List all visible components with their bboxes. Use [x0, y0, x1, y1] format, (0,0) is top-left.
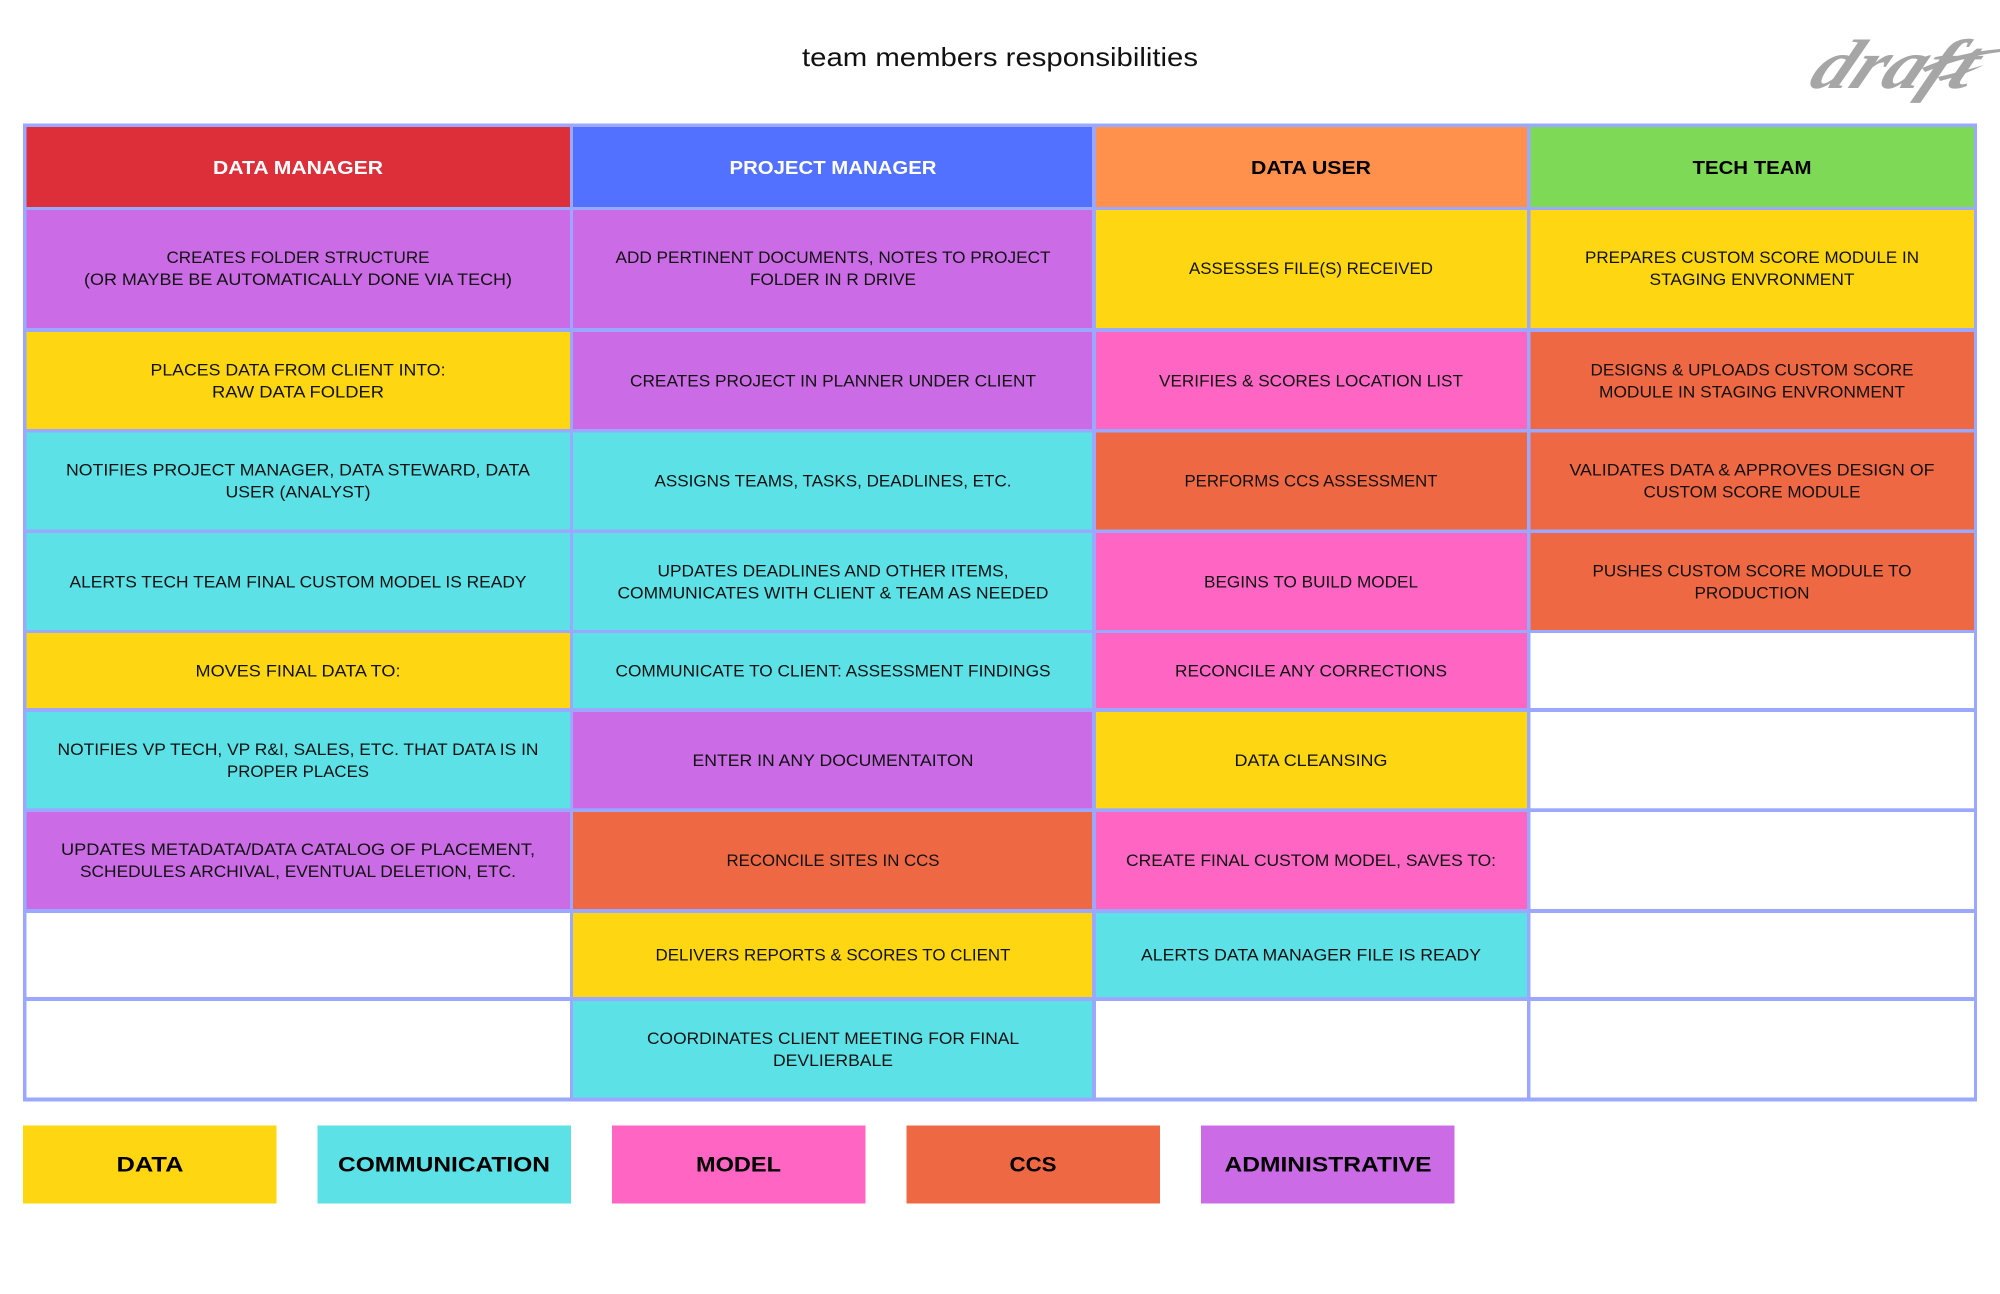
project manager: enter documentation: ENTER IN ANY DOCUMENTAITON — [692, 751, 974, 770]
tech team: empty cell — [1530, 633, 1974, 708]
tech team: prepares custom score module: PREPARES CUSTOM SCORE MODULE IN — [1585, 248, 1919, 267]
data user: begins to build model — [1096, 533, 1527, 630]
project manager: coordinates client meeting: DEVLIERBALE — [773, 1051, 893, 1070]
legend: administrative — [1201, 1126, 1454, 1204]
column header: project manager — [573, 127, 1092, 207]
project manager: creates project — [573, 332, 1092, 429]
column header: data manager — [26, 127, 570, 207]
column header: data user: DATA USER — [1251, 157, 1371, 178]
data manager: alerts tech team — [26, 533, 570, 630]
data user: data cleansing: DATA CLEANSING — [1234, 751, 1388, 770]
responsibilities table — [23, 124, 1977, 1102]
data user: assesses files — [1096, 210, 1527, 328]
tech team: prepares custom score module: STAGING ENVRONMENT — [1650, 270, 1854, 289]
project manager: creates project: CREATES PROJECT IN PLANNER UNDER CLIENT — [630, 372, 1036, 390]
project manager: assigns teams: ASSIGNS TEAMS, TASKS, DEADLINES, ETC. — [654, 472, 1012, 490]
column header: tech team — [1530, 127, 1974, 207]
tech team: pushes to production: PUSHES CUSTOM SCORE MODULE TO — [1592, 562, 1912, 580]
data user: verifies location list: VERIFIES & SCORES LOCATION LIST — [1159, 372, 1463, 390]
data manager: places data: PLACES DATA FROM CLIENT INTO: — [150, 360, 446, 380]
data manager: creates folder structure: CREATES FOLDER STRUCTURE — [166, 248, 430, 267]
legend: model — [612, 1126, 866, 1204]
data user: verifies location list — [1096, 332, 1527, 429]
project manager: communicate findings — [573, 633, 1092, 708]
tech team: pushes to production — [1530, 533, 1974, 630]
data manager: moves final data — [26, 633, 570, 708]
data user: ccs assessment: PERFORMS CCS ASSESSMENT — [1184, 472, 1438, 490]
data manager: notifies project manager: NOTIFIES PROJECT MANAGER, DATA STEWARD, DATA — [66, 460, 531, 480]
project manager: reconcile sites: RECONCILE SITES IN CCS — [726, 851, 940, 870]
tech team: validates data — [1530, 432, 1974, 530]
project manager: delivers reports — [573, 913, 1092, 997]
column header: tech team: TECH TEAM — [1692, 157, 1812, 178]
tech team: validates data: CUSTOM SCORE MODULE — [1644, 482, 1860, 502]
column header: project manager: PROJECT MANAGER — [730, 157, 936, 178]
project manager: updates deadlines: UPDATES DEADLINES AND OTHER ITEMS, — [658, 562, 1008, 580]
tech team: designs and uploads: MODULE IN STAGING ENVRONMENT — [1599, 382, 1905, 402]
data manager: updates metadata: UPDATES METADATA/DATA CATALOG OF PLACEMENT, — [61, 840, 535, 859]
tech team: designs and uploads: DESIGNS & UPLOADS CUSTOM SCORE — [1590, 360, 1914, 380]
project manager: updates deadlines: COMMUNICATES WITH CLIENT & TEAM AS NEEDED — [618, 584, 1048, 602]
data manager: places data — [26, 332, 570, 429]
tech team: prepares custom score module — [1530, 210, 1974, 328]
project manager: reconcile sites — [573, 812, 1092, 909]
data manager: empty cell — [26, 1001, 570, 1098]
legend: data: DATA — [116, 1152, 184, 1176]
data manager: notifies project manager — [26, 432, 570, 530]
tech team: empty cell — [1530, 1001, 1974, 1098]
legend: ccs: CCS — [1010, 1152, 1056, 1176]
data manager: notifies vp — [26, 712, 570, 808]
tech team: designs and uploads — [1530, 332, 1974, 429]
data user: alerts data manager — [1096, 913, 1527, 997]
project manager: coordinates client meeting: COORDINATES CLIENT MEETING FOR FINAL — [647, 1029, 1019, 1048]
tech team: empty cell — [1530, 712, 1974, 808]
data user: ccs assessment — [1096, 432, 1527, 530]
data manager: notifies vp: PROPER PLACES — [227, 762, 369, 781]
data user: assesses files: ASSESSES FILE(S) RECEIVED — [1189, 259, 1433, 278]
tech team: empty cell — [1530, 913, 1974, 997]
project manager: delivers reports: DELIVERS REPORTS & SCORES TO CLIENT — [656, 946, 1010, 964]
project manager: add pertinent documents: ADD PERTINENT DOCUMENTS, NOTES TO PROJECT — [616, 248, 1050, 267]
data user: alerts data manager: ALERTS DATA MANAGER FILE IS READY — [1141, 946, 1481, 964]
data user: empty cell — [1096, 1001, 1527, 1098]
project manager: updates deadlines — [573, 533, 1092, 630]
data manager: updates metadata — [26, 812, 570, 909]
data manager: empty cell — [26, 913, 570, 997]
legend: data — [23, 1126, 276, 1204]
project manager: coordinates client meeting — [573, 1001, 1092, 1098]
data user: begins to build model: BEGINS TO BUILD MODEL — [1204, 572, 1418, 592]
data user: create final model: CREATE FINAL CUSTOM MODEL, SAVES TO: — [1126, 851, 1496, 870]
data manager: creates folder structure — [26, 210, 570, 328]
title: team members responsibilities — [802, 42, 1198, 72]
project manager: enter documentation — [573, 712, 1092, 808]
tech team: pushes to production: PRODUCTION — [1694, 584, 1810, 602]
draft watermark: draft — [1798, 27, 1999, 104]
legend: ccs — [906, 1126, 1160, 1204]
data manager: notifies vp: NOTIFIES VP TECH, VP R&I, SALES, ETC. THAT DATA IS IN — [58, 740, 538, 759]
data manager: updates metadata: SCHEDULES ARCHIVAL, EVENTUAL DELETION, ETC. — [80, 862, 516, 881]
column header: data user — [1096, 127, 1527, 207]
data user: reconcile corrections: RECONCILE ANY CORRECTIONS — [1175, 662, 1447, 680]
data manager: places data: RAW DATA FOLDER — [212, 382, 384, 402]
data manager: notifies project manager: USER (ANALYST) — [226, 482, 370, 502]
data user: reconcile corrections — [1096, 633, 1527, 708]
project manager: communicate findings: COMMUNICATE TO CLIENT: ASSESSMENT FINDINGS — [616, 662, 1050, 680]
data manager: moves final data: MOVES FINAL DATA TO: — [196, 662, 400, 680]
data manager: creates folder structure: (OR MAYBE BE AUTOMATICALLY DONE VIA TECH) — [84, 270, 512, 289]
legend — [23, 1126, 1454, 1204]
project manager: add pertinent documents — [573, 210, 1092, 328]
project manager: assigns teams — [573, 432, 1092, 530]
project manager: add pertinent documents: FOLDER IN R DRIVE — [750, 270, 916, 289]
legend: administrative: ADMINISTRATIVE — [1224, 1152, 1432, 1176]
tech team: validates data: VALIDATES DATA & APPROVES DESIGN OF — [1570, 460, 1934, 480]
column header: data manager: DATA MANAGER — [213, 157, 383, 178]
data user: data cleansing — [1096, 712, 1527, 808]
tech team: empty cell — [1530, 812, 1974, 909]
legend: model: MODEL — [696, 1152, 781, 1176]
legend: communication: COMMUNICATION — [338, 1152, 550, 1176]
legend: communication — [318, 1126, 571, 1204]
data user: create final model — [1096, 812, 1527, 909]
data manager: alerts tech team: ALERTS TECH TEAM FINAL CUSTOM MODEL IS READY — [70, 572, 526, 592]
